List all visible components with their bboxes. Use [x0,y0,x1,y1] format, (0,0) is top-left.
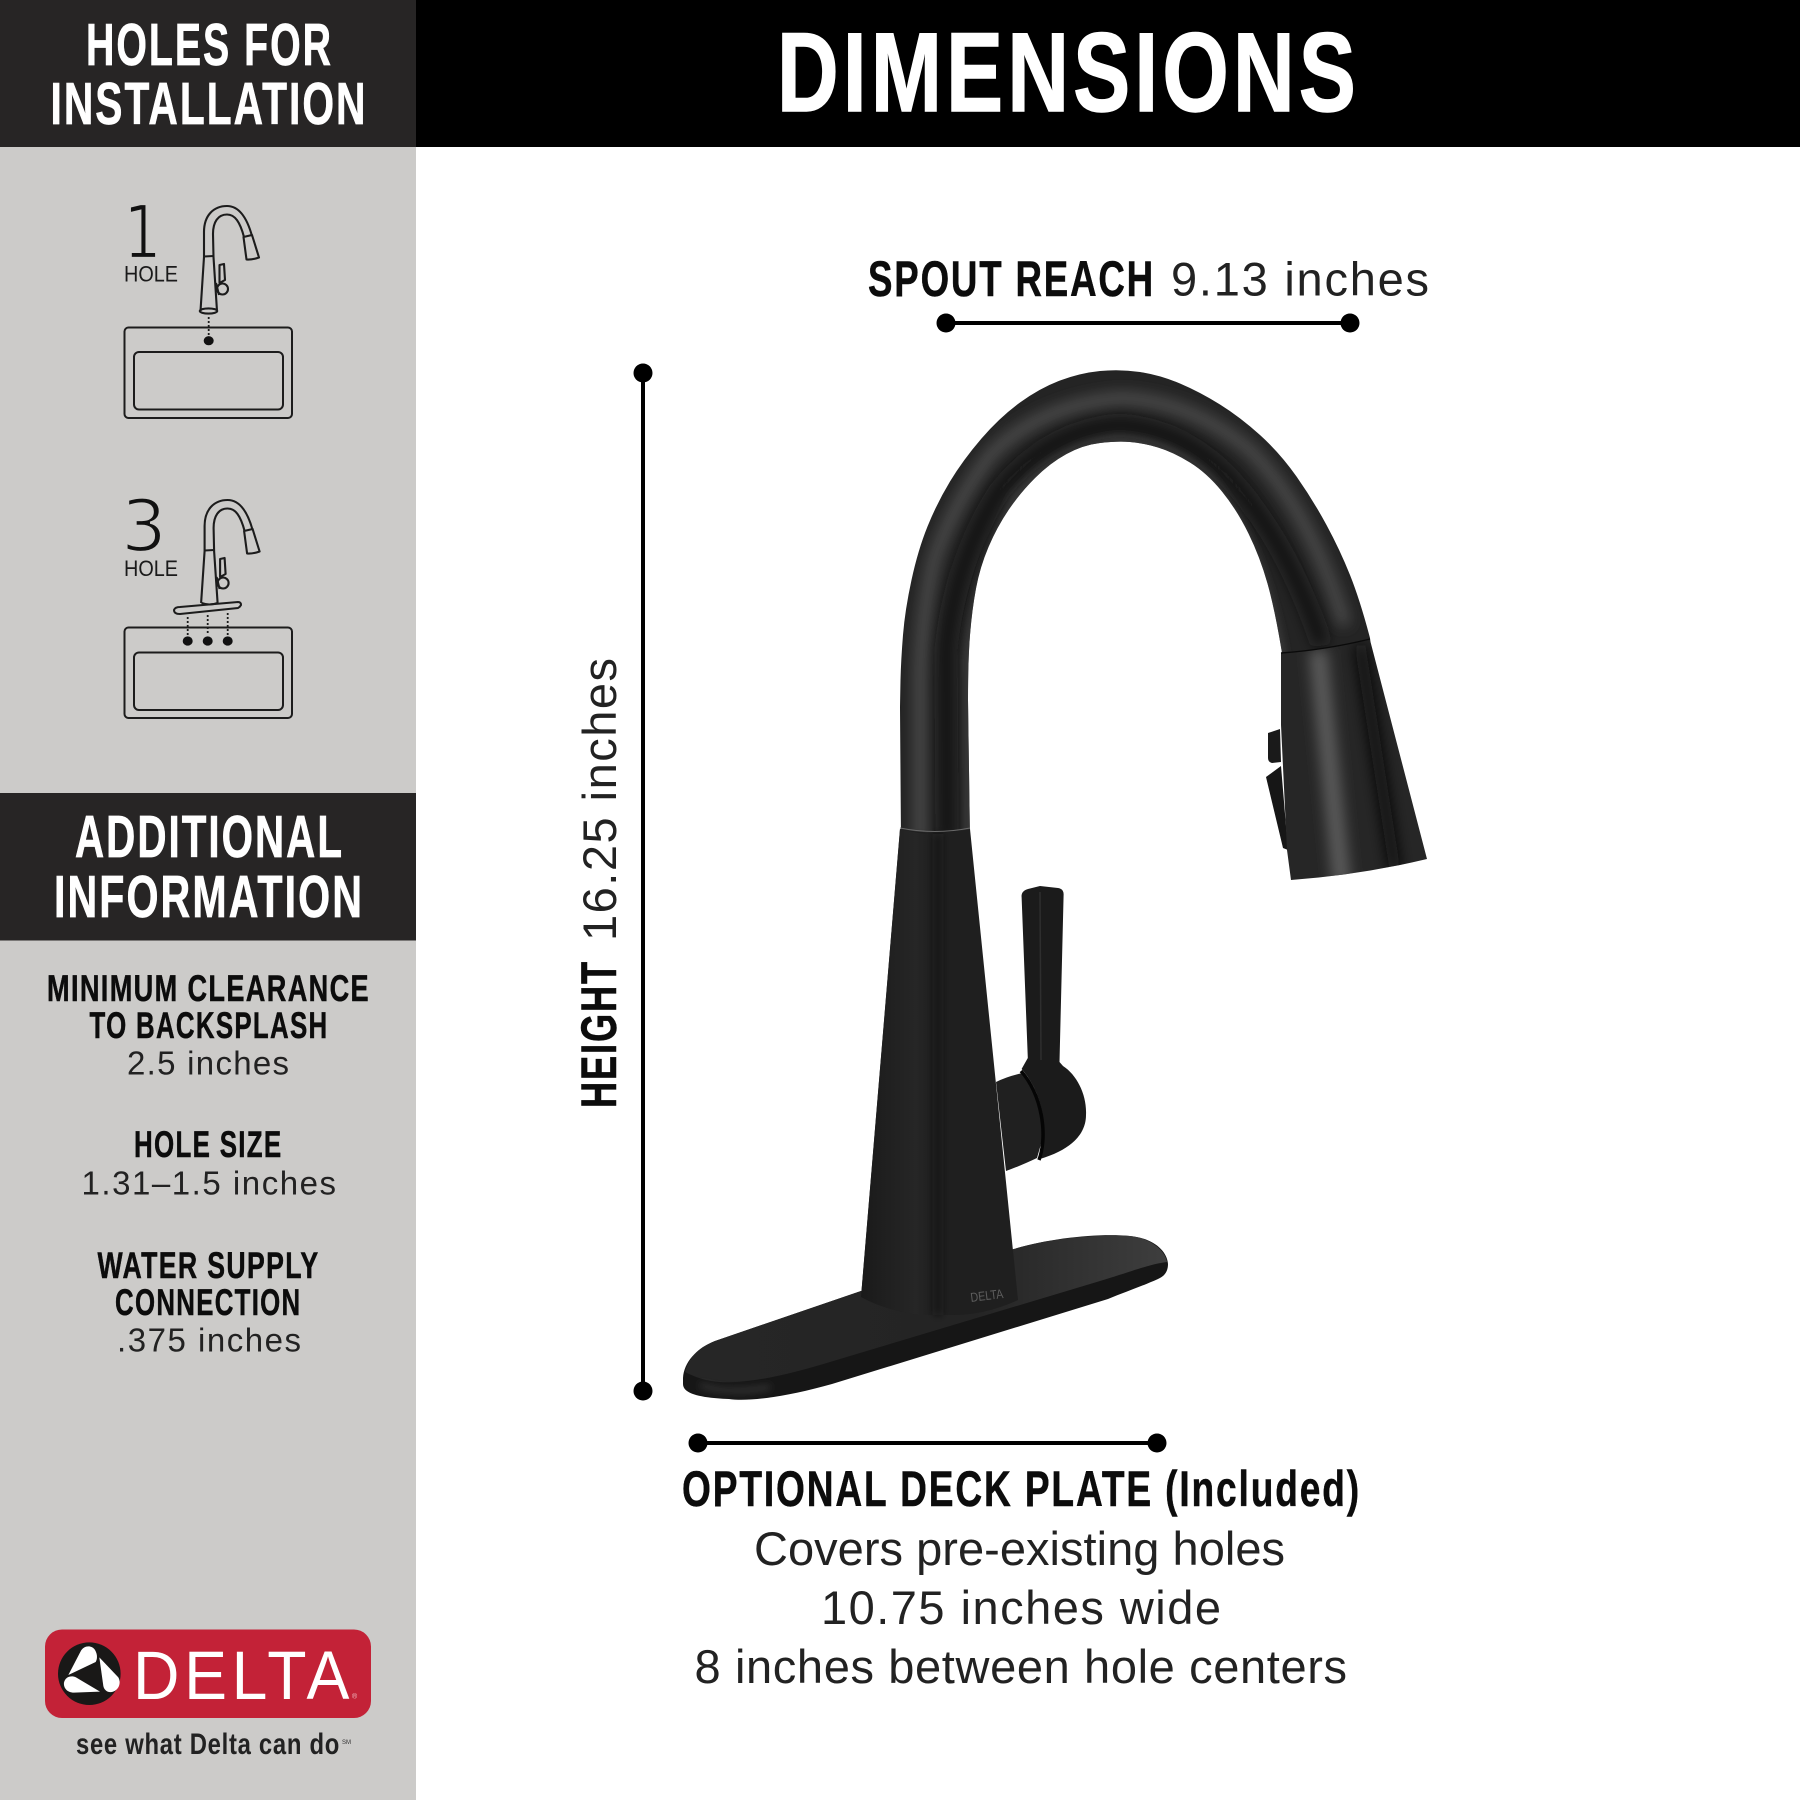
heading: holes for installation [0,0,416,147]
deck plate [683,1235,1168,1400]
heading: holes for installation: HOLES FOR [86,12,333,78]
logo: Delta: DELTA [133,1637,354,1714]
dimension line: spout reach [936,314,1360,332]
heading: additional information: ADDITIONAL [75,804,344,870]
dimension: height label [571,658,627,1108]
dimension: spout reach label [868,251,1429,307]
icon: faucet outline [200,206,259,314]
icon: sink with three holes [124,613,292,718]
icon: sink with one hole [124,317,292,418]
logo: Delta: see what Delta can do [76,1728,340,1761]
text block: hole size: 1.31–1.5 inches [82,1164,336,1202]
text block: minimum clearance: 2.5 inches [127,1044,289,1082]
illustration: black pull-down faucet [683,370,1427,1400]
heading: additional information: INFORMATION [54,864,364,930]
text block: water supply connection: WATER SUPPLY [98,1245,320,1286]
icon group: three hole installation [121,484,292,718]
dimension line: deck plate [688,1434,1166,1452]
logo: Delta [45,1630,371,1761]
text block: optional deck plate: 10.75 inches wide [821,1581,1221,1634]
icon: faucet outline with deck plate [201,500,260,604]
dimension: spout reach label: SPOUT REACH [868,251,1155,307]
spout body tube [900,370,1371,840]
text block: water supply connection: CONNECTION [115,1282,302,1323]
dimension line: height [634,364,652,1400]
text block: hole size: HOLE SIZE [134,1124,282,1165]
text block: water supply connection [98,1245,320,1358]
tapered base [861,828,1018,1315]
logo: Delta: ® [352,1692,358,1700]
dimension: height label: HEIGHT [571,960,627,1108]
engraved brand mark: DELTA [970,1286,1004,1305]
dimension: spout reach label: 9.13 inches [1171,252,1429,306]
icon: Delta drops [64,1646,120,1693]
text block: hole size [82,1124,336,1202]
text block: optional deck plate: Covers pre-existing holes [754,1522,1285,1575]
text block: minimum clearance: TO BACKSPLASH [90,1005,328,1046]
text block: optional deck plate: OPTIONAL DECK PLATE (Included) [682,1461,1361,1517]
panel: sidebar background [0,0,416,1800]
icon group: one hole installation: HOLE [124,262,178,286]
spray head [1266,639,1427,885]
title: dimensions [416,0,1800,147]
title: dimensions: DIMENSIONS [777,10,1360,135]
dimension: height label: 16.25 inches [573,658,626,941]
icon group: three hole installation: 3 [121,484,167,568]
logo: Delta: SM [342,1740,351,1746]
lever handle [996,886,1086,1171]
icon group: one hole installation: 1 [124,190,162,276]
icon group: three hole installation: HOLE [124,556,178,581]
text block: optional deck plate [682,1461,1361,1693]
text block: minimum clearance [47,968,370,1082]
text block: optional deck plate: 8 inches between hole centers [694,1640,1347,1693]
heading: holes for installation: INSTALLATION [50,71,368,137]
icon group: one hole installation [124,190,292,418]
text block: minimum clearance: MINIMUM CLEARANCE [47,968,370,1009]
heading: additional information [0,793,416,940]
icon: deck plate [174,602,241,614]
text block: water supply connection: .375 inches [117,1322,301,1358]
